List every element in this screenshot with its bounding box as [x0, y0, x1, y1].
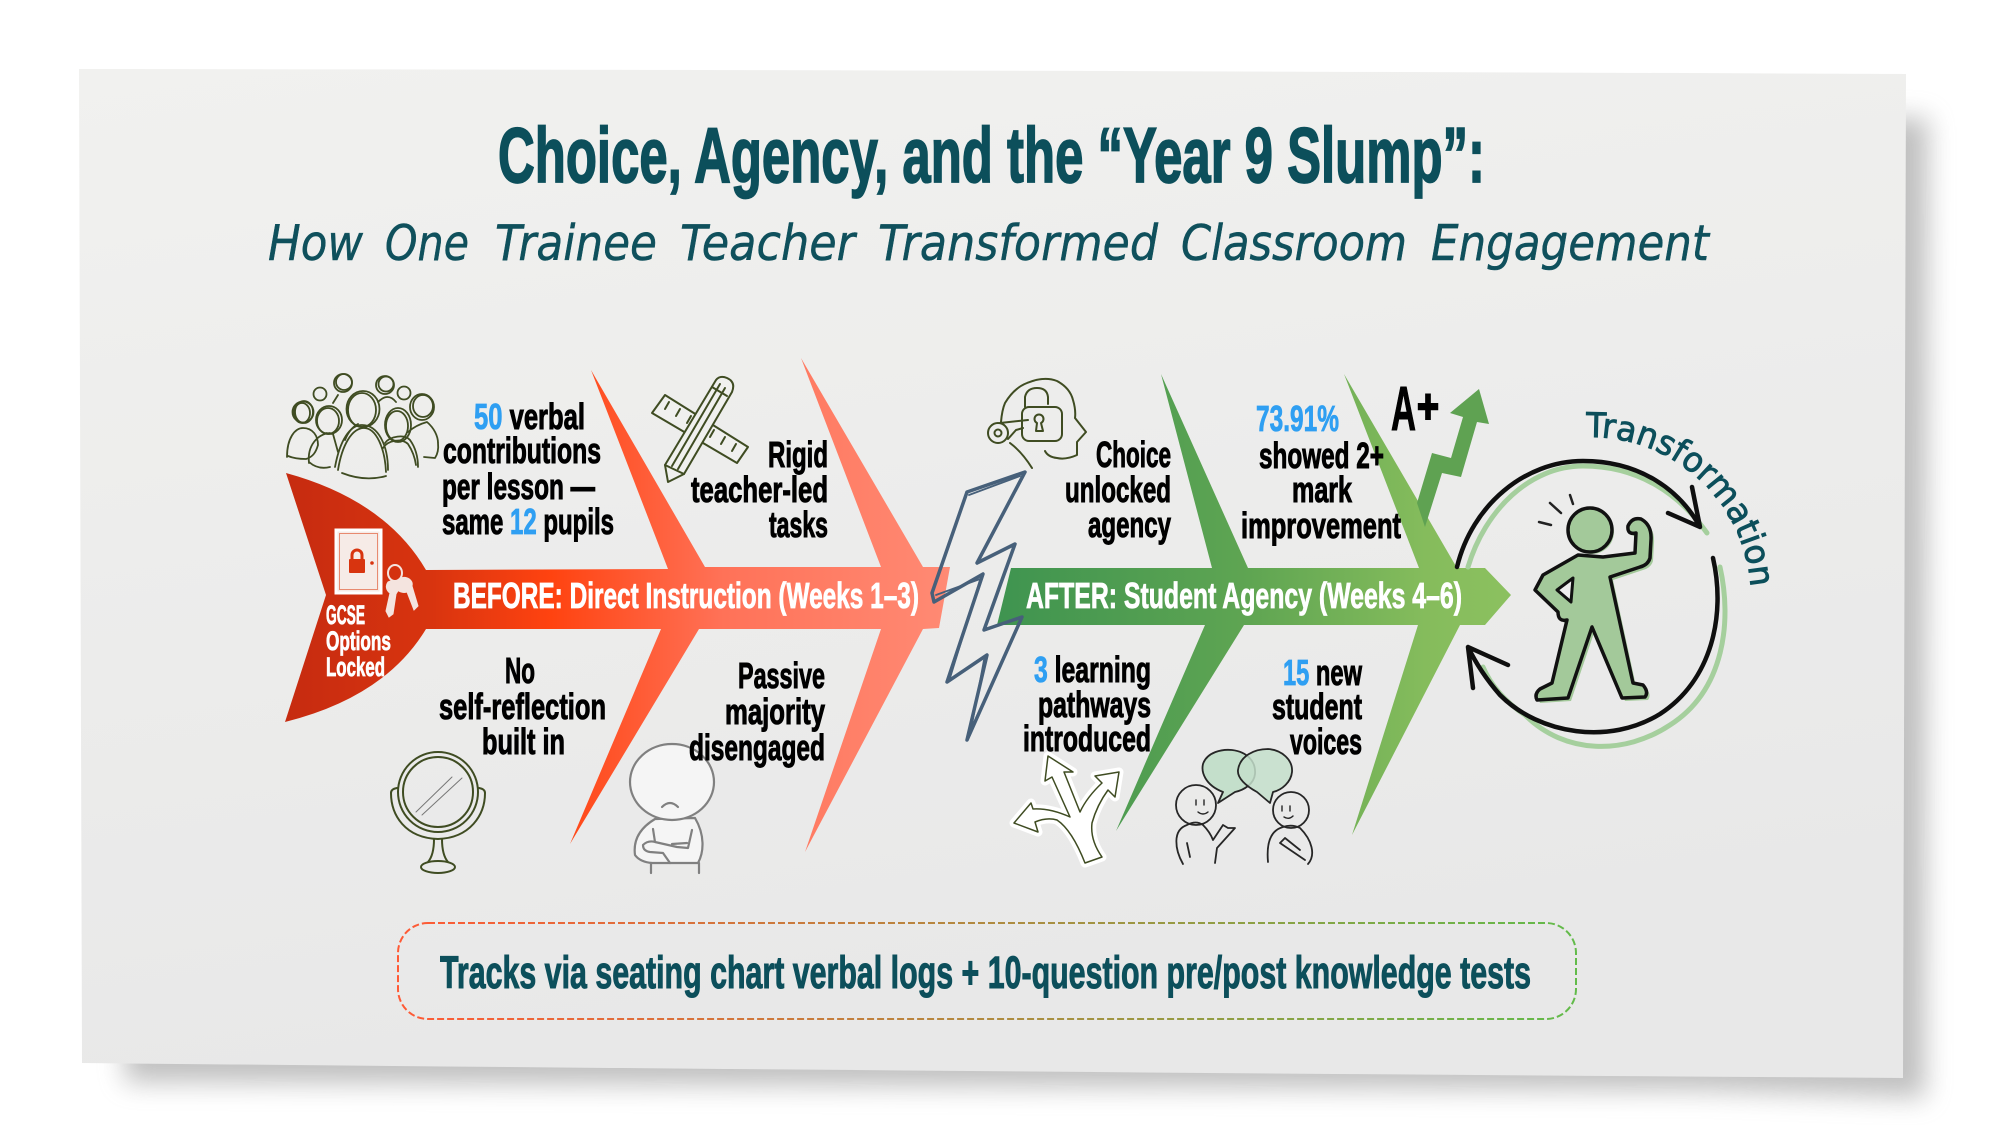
tail label: GCSE Options Locked: Options: [326, 626, 391, 656]
title: Choice, Agency, and the “Year 9 Slump”:: [498, 111, 1485, 199]
grade label A+: A: [1391, 375, 1416, 444]
subtitle: Teacher: [680, 215, 858, 272]
text: passive majority: majority: [725, 691, 825, 732]
text: mark improvement: [1241, 398, 1401, 546]
text: verbal contributions: per lesson —: [442, 466, 595, 507]
text: choice unlocked agency: [1065, 434, 1171, 545]
tail label: GCSE Options Locked: GCSE: [326, 600, 365, 630]
icon: crowd of pupils: [287, 374, 438, 478]
icon: rising arrow: [1417, 389, 1489, 527]
after label: AFTER: Student Agency (Weeks 4–6): [1026, 575, 1462, 616]
text: verbal contributions: 50 verbal: [474, 396, 585, 437]
text: rigid tasks: [691, 434, 828, 545]
icon: locked door: [336, 530, 381, 593]
subtitle: How: [268, 215, 364, 272]
text: mark improvement: improvement: [1241, 505, 1401, 546]
icon: ruler and pencil: [652, 377, 748, 482]
text: verbal contributions: contributions: [443, 430, 601, 471]
subtitle: Engagement: [1431, 215, 1711, 272]
icon: two students talking: [1176, 749, 1312, 864]
text: new student voices: voices: [1290, 721, 1362, 762]
text: new student voices: 15 new: [1283, 652, 1363, 693]
icon: triumphant figure: [1535, 495, 1654, 703]
icon: lightning bolt: [932, 472, 1025, 740]
text: learning pathways: introduced: [1023, 718, 1151, 759]
paper shadow: [120, 118, 1928, 1098]
text: rigid tasks: Rigid: [768, 434, 828, 475]
text: no self-reflection: self-reflection: [439, 686, 606, 727]
tail label: GCSE Options Locked: [326, 600, 391, 682]
subtitle: Classroom: [1181, 215, 1407, 272]
text: no self-reflection: [439, 650, 606, 762]
text: choice unlocked agency: Choice: [1096, 434, 1171, 475]
text: choice unlocked agency: agency: [1088, 504, 1171, 545]
subtitle: Trainee: [495, 215, 657, 272]
text: new student voices: [1272, 652, 1363, 762]
text: mark improvement: mark: [1292, 469, 1353, 510]
icon: disengaged person: [630, 744, 714, 873]
dashed callout box: [398, 923, 1576, 1019]
text: learning pathways: [1023, 649, 1151, 759]
text: passive majority: Passive: [738, 655, 825, 696]
label: Transformation: Transformation: [1586, 412, 1770, 585]
text: no self-reflection: built in: [482, 721, 565, 762]
text: verbal contributions: [442, 396, 614, 542]
icon: mirror: [391, 752, 485, 873]
text: mark improvement: 73.91%: [1256, 398, 1339, 439]
icon: keys: [386, 565, 418, 617]
text: rigid tasks: tasks: [769, 504, 828, 545]
before label: BEFORE: Direct Instruction (Weeks 1–3): [453, 575, 919, 616]
grade label A+: +: [1417, 381, 1439, 434]
text: choice unlocked agency: unlocked: [1065, 469, 1171, 510]
tail label: GCSE Options Locked: Locked: [326, 652, 385, 682]
after arrow: fishbone: [997, 374, 1511, 835]
subtitle: Transformed: [878, 215, 1159, 272]
before arrow: fishbone: [285, 358, 950, 852]
transformation cycle: [1457, 461, 1725, 746]
text: new student voices: student: [1272, 686, 1362, 727]
icon: branching arrows: [1014, 756, 1119, 863]
text: rigid tasks: teacher-led: [691, 469, 828, 510]
text: verbal contributions: same 12 pupils: [442, 501, 614, 542]
text: learning pathways: pathways: [1038, 684, 1151, 725]
icon: head with lock and key: [988, 379, 1086, 468]
text: passive majority: disengaged: [689, 727, 825, 768]
subtitle: One: [385, 215, 469, 272]
text: passive majority: [689, 655, 825, 768]
text: mark improvement: showed 2+: [1259, 435, 1384, 476]
subtitle: [268, 215, 1711, 272]
text: no self-reflection: No: [505, 650, 535, 691]
text: learning pathways: 3 learning: [1034, 649, 1151, 690]
